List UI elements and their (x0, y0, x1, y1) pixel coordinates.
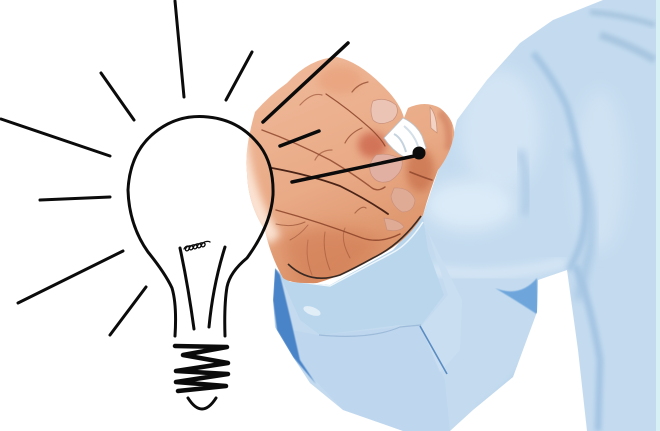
light bulb drawing (128, 117, 273, 409)
dark side shadow of cuff (273, 268, 316, 384)
hand (238, 57, 454, 285)
armhole seam shadow (533, 53, 585, 270)
right edge (656, 0, 660, 431)
blue shadow under sleeve (495, 278, 538, 315)
shirt sleeve and torso (260, 0, 660, 431)
filament coil (184, 241, 210, 251)
screw base (175, 346, 228, 391)
cuff (280, 217, 444, 335)
light rays (1, 1, 419, 335)
fingernails (370, 99, 437, 231)
bulb glass outline (128, 117, 273, 336)
marker pen (384, 118, 426, 160)
upper arm highlights (462, 72, 538, 184)
lower sleeve (275, 327, 403, 431)
finger creases (262, 82, 432, 275)
filament supports (180, 248, 194, 329)
shoulder folds (590, 12, 655, 25)
